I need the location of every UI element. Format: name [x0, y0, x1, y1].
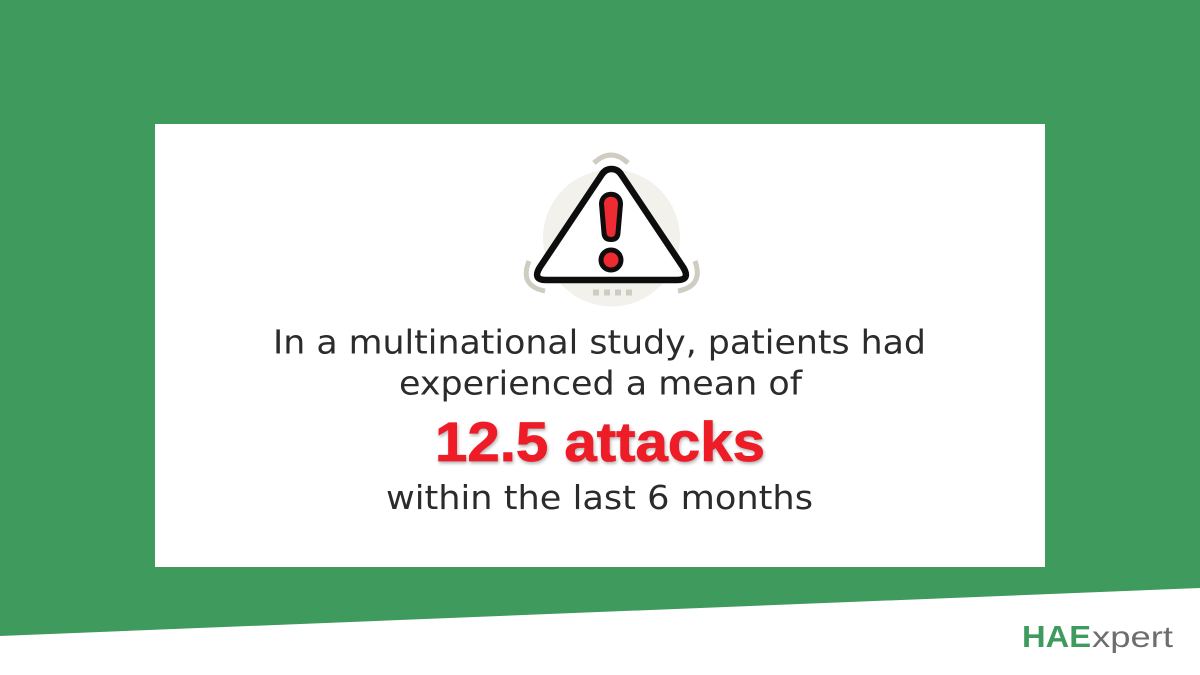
- text: highlighted statistic: 12.5 attacks: [435, 410, 765, 473]
- logo: HAExpert: [1022, 619, 1174, 654]
- text: study statement line 1: In a multinational study, patients had: [273, 322, 926, 362]
- white card panel: [155, 124, 1045, 567]
- text: study statement line 2: experienced a mean of: [399, 364, 803, 402]
- text: time frame: within the last 6 months: [386, 478, 813, 517]
- logo: HAExpert: HAE: [1022, 619, 1091, 654]
- icon: warning triangle: [526, 155, 697, 306]
- logo: HAExpert: xpert: [1092, 621, 1174, 654]
